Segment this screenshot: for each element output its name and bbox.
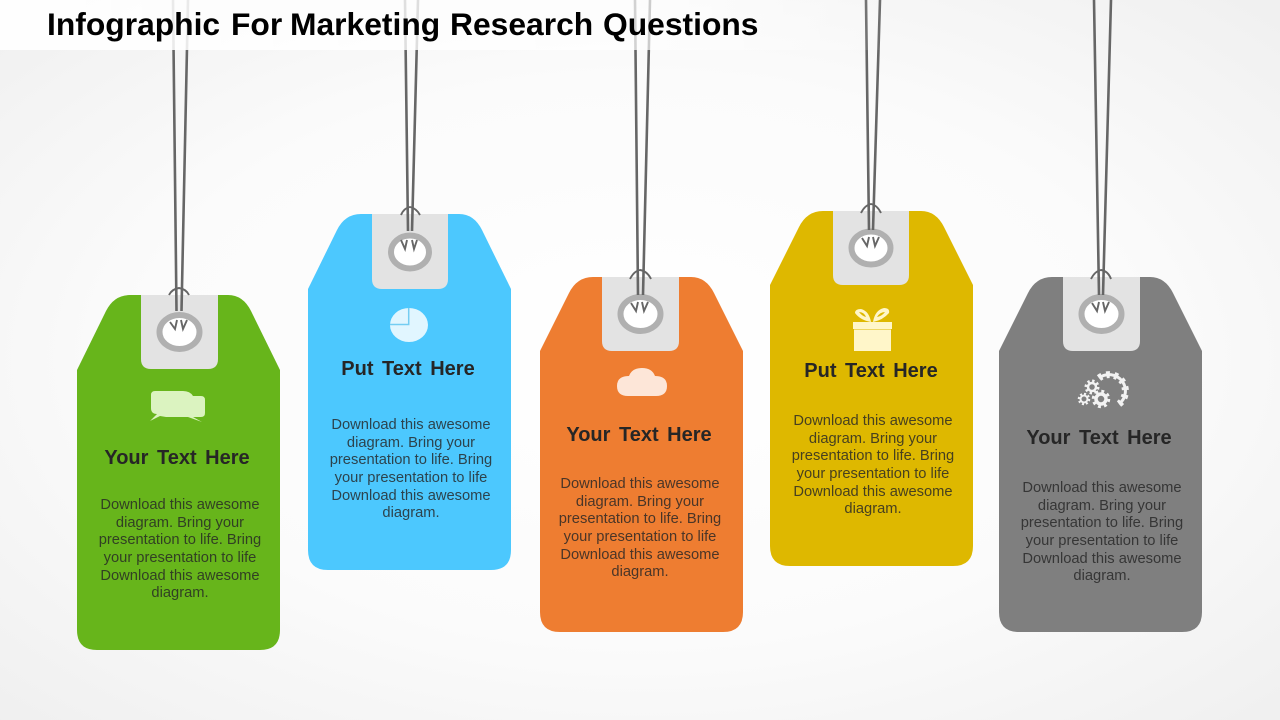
- body text: grey: Download this awesome: [1022, 551, 1182, 567]
- tag body: yellow: [770, 211, 973, 566]
- icon: speech bubbles: [150, 391, 205, 422]
- body text: blue: presentation to life. Bring: [330, 452, 492, 468]
- eyelet: yellow: [852, 232, 890, 264]
- body text: yellow: diagram. Bring your: [809, 431, 937, 447]
- body text: grey: presentation to life. Bring: [1021, 515, 1183, 531]
- tag 5: grey: [999, 0, 1202, 632]
- eyelet: blue: [391, 236, 429, 268]
- body text: green: Download this awesome: [100, 568, 260, 584]
- body text: blue: your presentation to life: [335, 470, 487, 486]
- body text: orange: diagram. Bring your: [576, 494, 704, 510]
- string: green: [169, 0, 189, 329]
- tag body: orange: [540, 277, 743, 632]
- body text: grey: diagram.: [1073, 568, 1131, 584]
- label tab: green: [141, 295, 218, 369]
- body text: green: your presentation to life: [104, 550, 256, 566]
- string: blue: [401, 0, 420, 249]
- title: For: [231, 6, 282, 42]
- heading: yellow: Put Text Here: [804, 360, 938, 382]
- heading: grey: Your Text Here: [1026, 427, 1172, 449]
- icon: pie chart: [390, 308, 428, 342]
- body text: orange: Download this awesome: [560, 547, 720, 563]
- tag 3: orange: [540, 0, 743, 632]
- title: Marketing: [290, 6, 440, 42]
- body text: blue: diagram. Bring your: [347, 435, 475, 451]
- body text: grey: your presentation to life: [1026, 533, 1178, 549]
- label tab: blue: [372, 214, 448, 289]
- string: yellow: [861, 0, 881, 246]
- body text: orange: your presentation to life: [564, 529, 716, 545]
- body text: blue: Download this awesome: [331, 417, 491, 433]
- title band: [0, 0, 900, 50]
- title: Infographic: [47, 6, 220, 42]
- icon: gift box: [853, 308, 892, 351]
- label tab: yellow: [833, 211, 909, 285]
- string: orange: [630, 0, 651, 311]
- body text: green: diagram. Bring your: [116, 515, 244, 531]
- body text: green: presentation to life. Bring: [99, 532, 261, 548]
- icon: cloud: [617, 368, 667, 396]
- tag 2: blue: [308, 0, 511, 570]
- heading: green: Your Text Here: [104, 447, 250, 469]
- body text: yellow: Download this awesome: [793, 484, 953, 500]
- label tab: orange: [602, 277, 679, 351]
- body text: grey: Download this awesome: [1022, 480, 1182, 496]
- body text: orange: Download this awesome: [560, 476, 720, 492]
- body text: yellow: Download this awesome: [793, 413, 953, 429]
- body text: grey: diagram. Bring your: [1038, 498, 1166, 514]
- heading: orange: Your Text Here: [566, 424, 712, 446]
- eyelet: orange: [620, 297, 660, 331]
- body text: blue: diagram.: [382, 505, 440, 521]
- tag body: blue: [308, 214, 511, 570]
- body text: orange: diagram.: [611, 564, 669, 580]
- body text: orange: presentation to life. Bring: [559, 511, 721, 527]
- body text: yellow: your presentation to life: [797, 466, 949, 482]
- icon: gears: [1079, 375, 1125, 406]
- tag body: green: [77, 295, 280, 650]
- tag 1: green: [77, 0, 280, 650]
- string: grey: [1091, 0, 1111, 311]
- eyelet: grey: [1082, 297, 1122, 331]
- body text: yellow: presentation to life. Bring: [792, 448, 954, 464]
- heading: blue: Put Text Here: [341, 358, 475, 380]
- body text: green: Download this awesome: [100, 497, 260, 513]
- title: Research: [450, 6, 593, 42]
- title: Questions: [603, 6, 758, 42]
- tag 4: yellow: [770, 0, 973, 566]
- body text: blue: Download this awesome: [331, 488, 491, 504]
- tag body: grey: [999, 277, 1202, 632]
- body text: green: diagram.: [151, 585, 209, 601]
- eyelet: green: [160, 315, 200, 349]
- label tab: grey: [1063, 277, 1140, 351]
- body text: yellow: diagram.: [844, 501, 902, 517]
